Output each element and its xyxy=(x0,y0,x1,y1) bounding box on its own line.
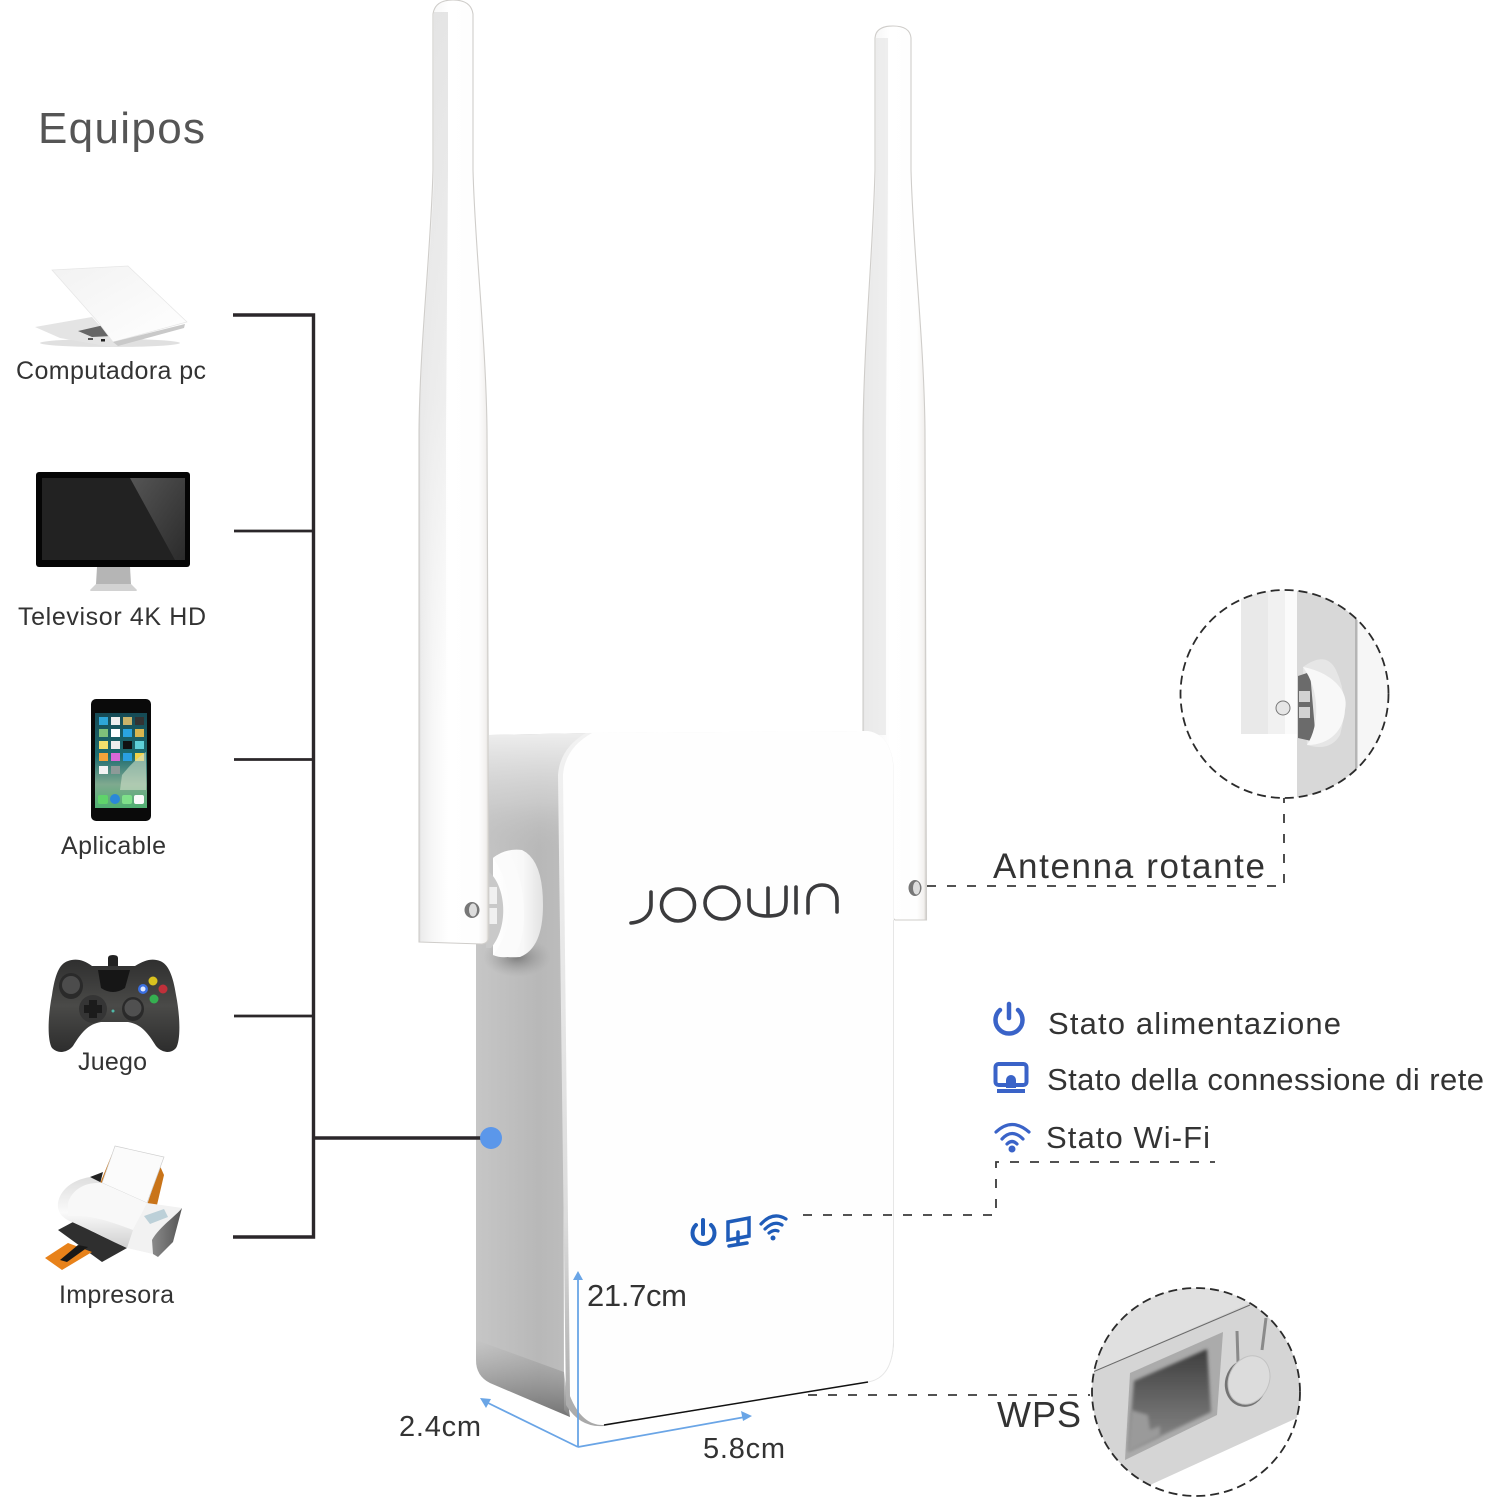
logo: JOOWIN xyxy=(631,885,837,923)
left antenna with hinge xyxy=(419,0,543,957)
label: height: 21.7cm xyxy=(587,1278,687,1313)
legend icon: network monitor xyxy=(996,1064,1026,1093)
right antenna xyxy=(863,26,926,920)
icon: monitor xyxy=(36,472,190,591)
icon: printer xyxy=(45,1146,182,1270)
callout: WPS port detail circle xyxy=(1085,1280,1310,1496)
icon: game controller xyxy=(49,955,179,1052)
router side panel xyxy=(476,733,590,1417)
icon: smartphone xyxy=(91,699,151,821)
legend icon: wifi xyxy=(996,1124,1029,1152)
legend icon: power xyxy=(996,1004,1022,1034)
label: Televisor 4K HD: Televisor 4K HD xyxy=(18,603,206,631)
legend: Stato Wi-Fi: Stato Wi-Fi xyxy=(1046,1120,1210,1155)
device tree connector xyxy=(233,315,482,1237)
title: Equipos: Equipos xyxy=(38,104,205,153)
legend: Stato alimentazione: Stato alimentazione xyxy=(1048,1006,1341,1041)
label: Juego: Juego xyxy=(78,1048,147,1076)
label: Aplicable: Aplicable xyxy=(61,832,166,860)
callout: antenna detail circle xyxy=(1180,585,1395,805)
router device xyxy=(476,731,894,1426)
label: Impresora: Impresora xyxy=(59,1281,174,1309)
label: Antenna rotante: Antenna rotante xyxy=(993,847,1265,886)
router front panel xyxy=(558,731,894,1426)
dimension arrows xyxy=(480,1271,752,1447)
blue connection dot xyxy=(480,1127,502,1149)
label: WPS: WPS xyxy=(997,1394,1081,1435)
icon: laptop xyxy=(35,266,187,347)
legend: Stato della connessione di rete: Stato della connessione di rete xyxy=(1047,1062,1484,1097)
LED icons on router xyxy=(693,1216,786,1246)
callout lines xyxy=(803,798,1284,1395)
label: Computadora pc: Computadora pc xyxy=(16,357,206,385)
label: width: 5.8cm xyxy=(703,1433,785,1465)
label: depth: 2.4cm xyxy=(399,1411,481,1443)
